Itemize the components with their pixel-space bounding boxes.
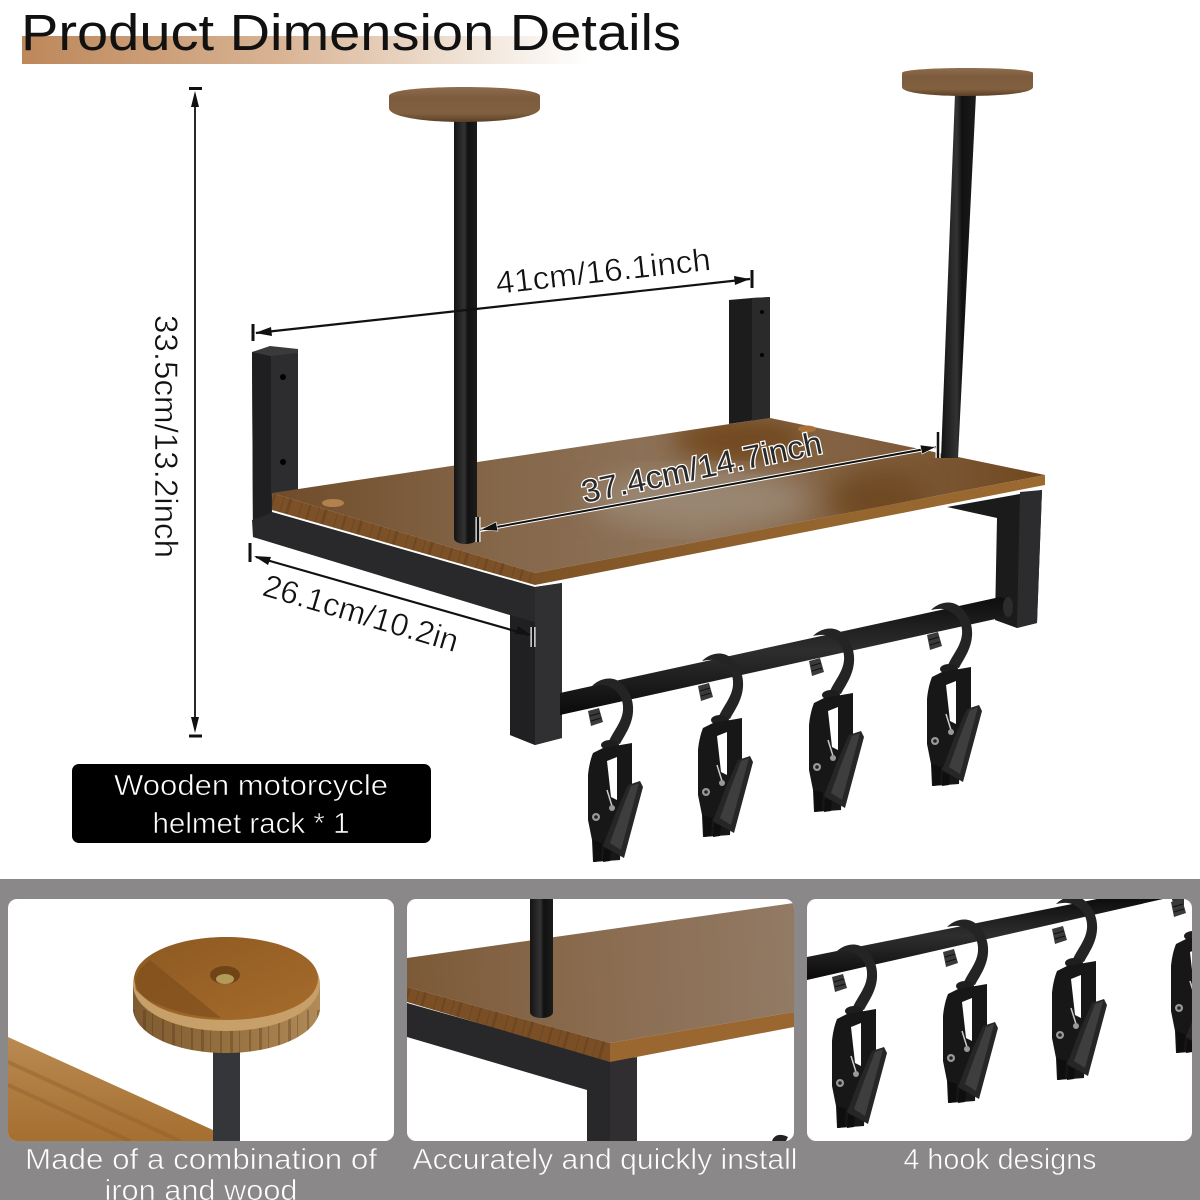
title	[21, 4, 681, 64]
panel: install detail	[407, 899, 794, 1141]
black frame	[407, 1003, 637, 1141]
wood shelf close-up	[407, 903, 794, 1062]
contents label: helmet rack * 1	[152, 808, 350, 840]
width dimension: 41cm/16.1inch	[253, 241, 752, 341]
width dimension: 37.4cm/14.7inch	[478, 425, 938, 542]
caption: materials: Made of a combination of	[25, 1144, 378, 1176]
feature band	[0, 879, 1200, 1200]
hanging rail	[560, 597, 1013, 715]
height dimension: 33.5cm/13.2inch	[148, 88, 202, 736]
wood shelf	[272, 416, 1045, 585]
hook 4	[1171, 902, 1192, 1053]
iron rod	[213, 1045, 240, 1141]
hook 2	[698, 654, 753, 837]
rod	[530, 899, 553, 1018]
hook 2	[943, 920, 998, 1103]
depth dimension: 26.1cm/10.2in	[250, 543, 533, 659]
height dimension: 33.5cm/13.2inch: 33.5cm/13.2inch	[148, 315, 184, 558]
panel: hooks detail	[807, 899, 1192, 1141]
hook 1	[832, 945, 887, 1128]
caption: install: Accurately and quickly install	[412, 1144, 798, 1176]
width dimension: 41cm/16.1inch: 41cm/16.1inch	[494, 241, 712, 301]
product: wall rack	[252, 68, 1045, 862]
title underline gradient	[22, 36, 590, 64]
title text: Product Dimension Details	[21, 4, 681, 61]
back bracket	[729, 297, 770, 424]
caption: materials	[25, 1144, 378, 1200]
rail	[807, 899, 1163, 980]
left upright rod and disc	[389, 87, 540, 544]
contents label: Wooden motorcycle	[114, 770, 388, 802]
caption: hooks: 4 hook designs	[904, 1144, 1096, 1176]
hook 4	[927, 603, 982, 786]
left bracket and frame	[252, 346, 562, 745]
wooden disc	[133, 937, 320, 1053]
contents label	[72, 764, 431, 843]
hook 3	[809, 629, 864, 812]
hook 3	[1052, 897, 1107, 1080]
panel: wooden disc detail	[8, 899, 394, 1141]
depth dimension: 26.1cm/10.2in: 26.1cm/10.2in	[259, 567, 463, 659]
right post and short arm	[947, 490, 1042, 628]
width dimension: 37.4cm/14.7inch: 37.4cm/14.7inch	[578, 425, 825, 510]
wood board corner	[8, 1037, 213, 1141]
right upright rod and disc	[902, 68, 1033, 458]
hook 1	[588, 679, 643, 862]
